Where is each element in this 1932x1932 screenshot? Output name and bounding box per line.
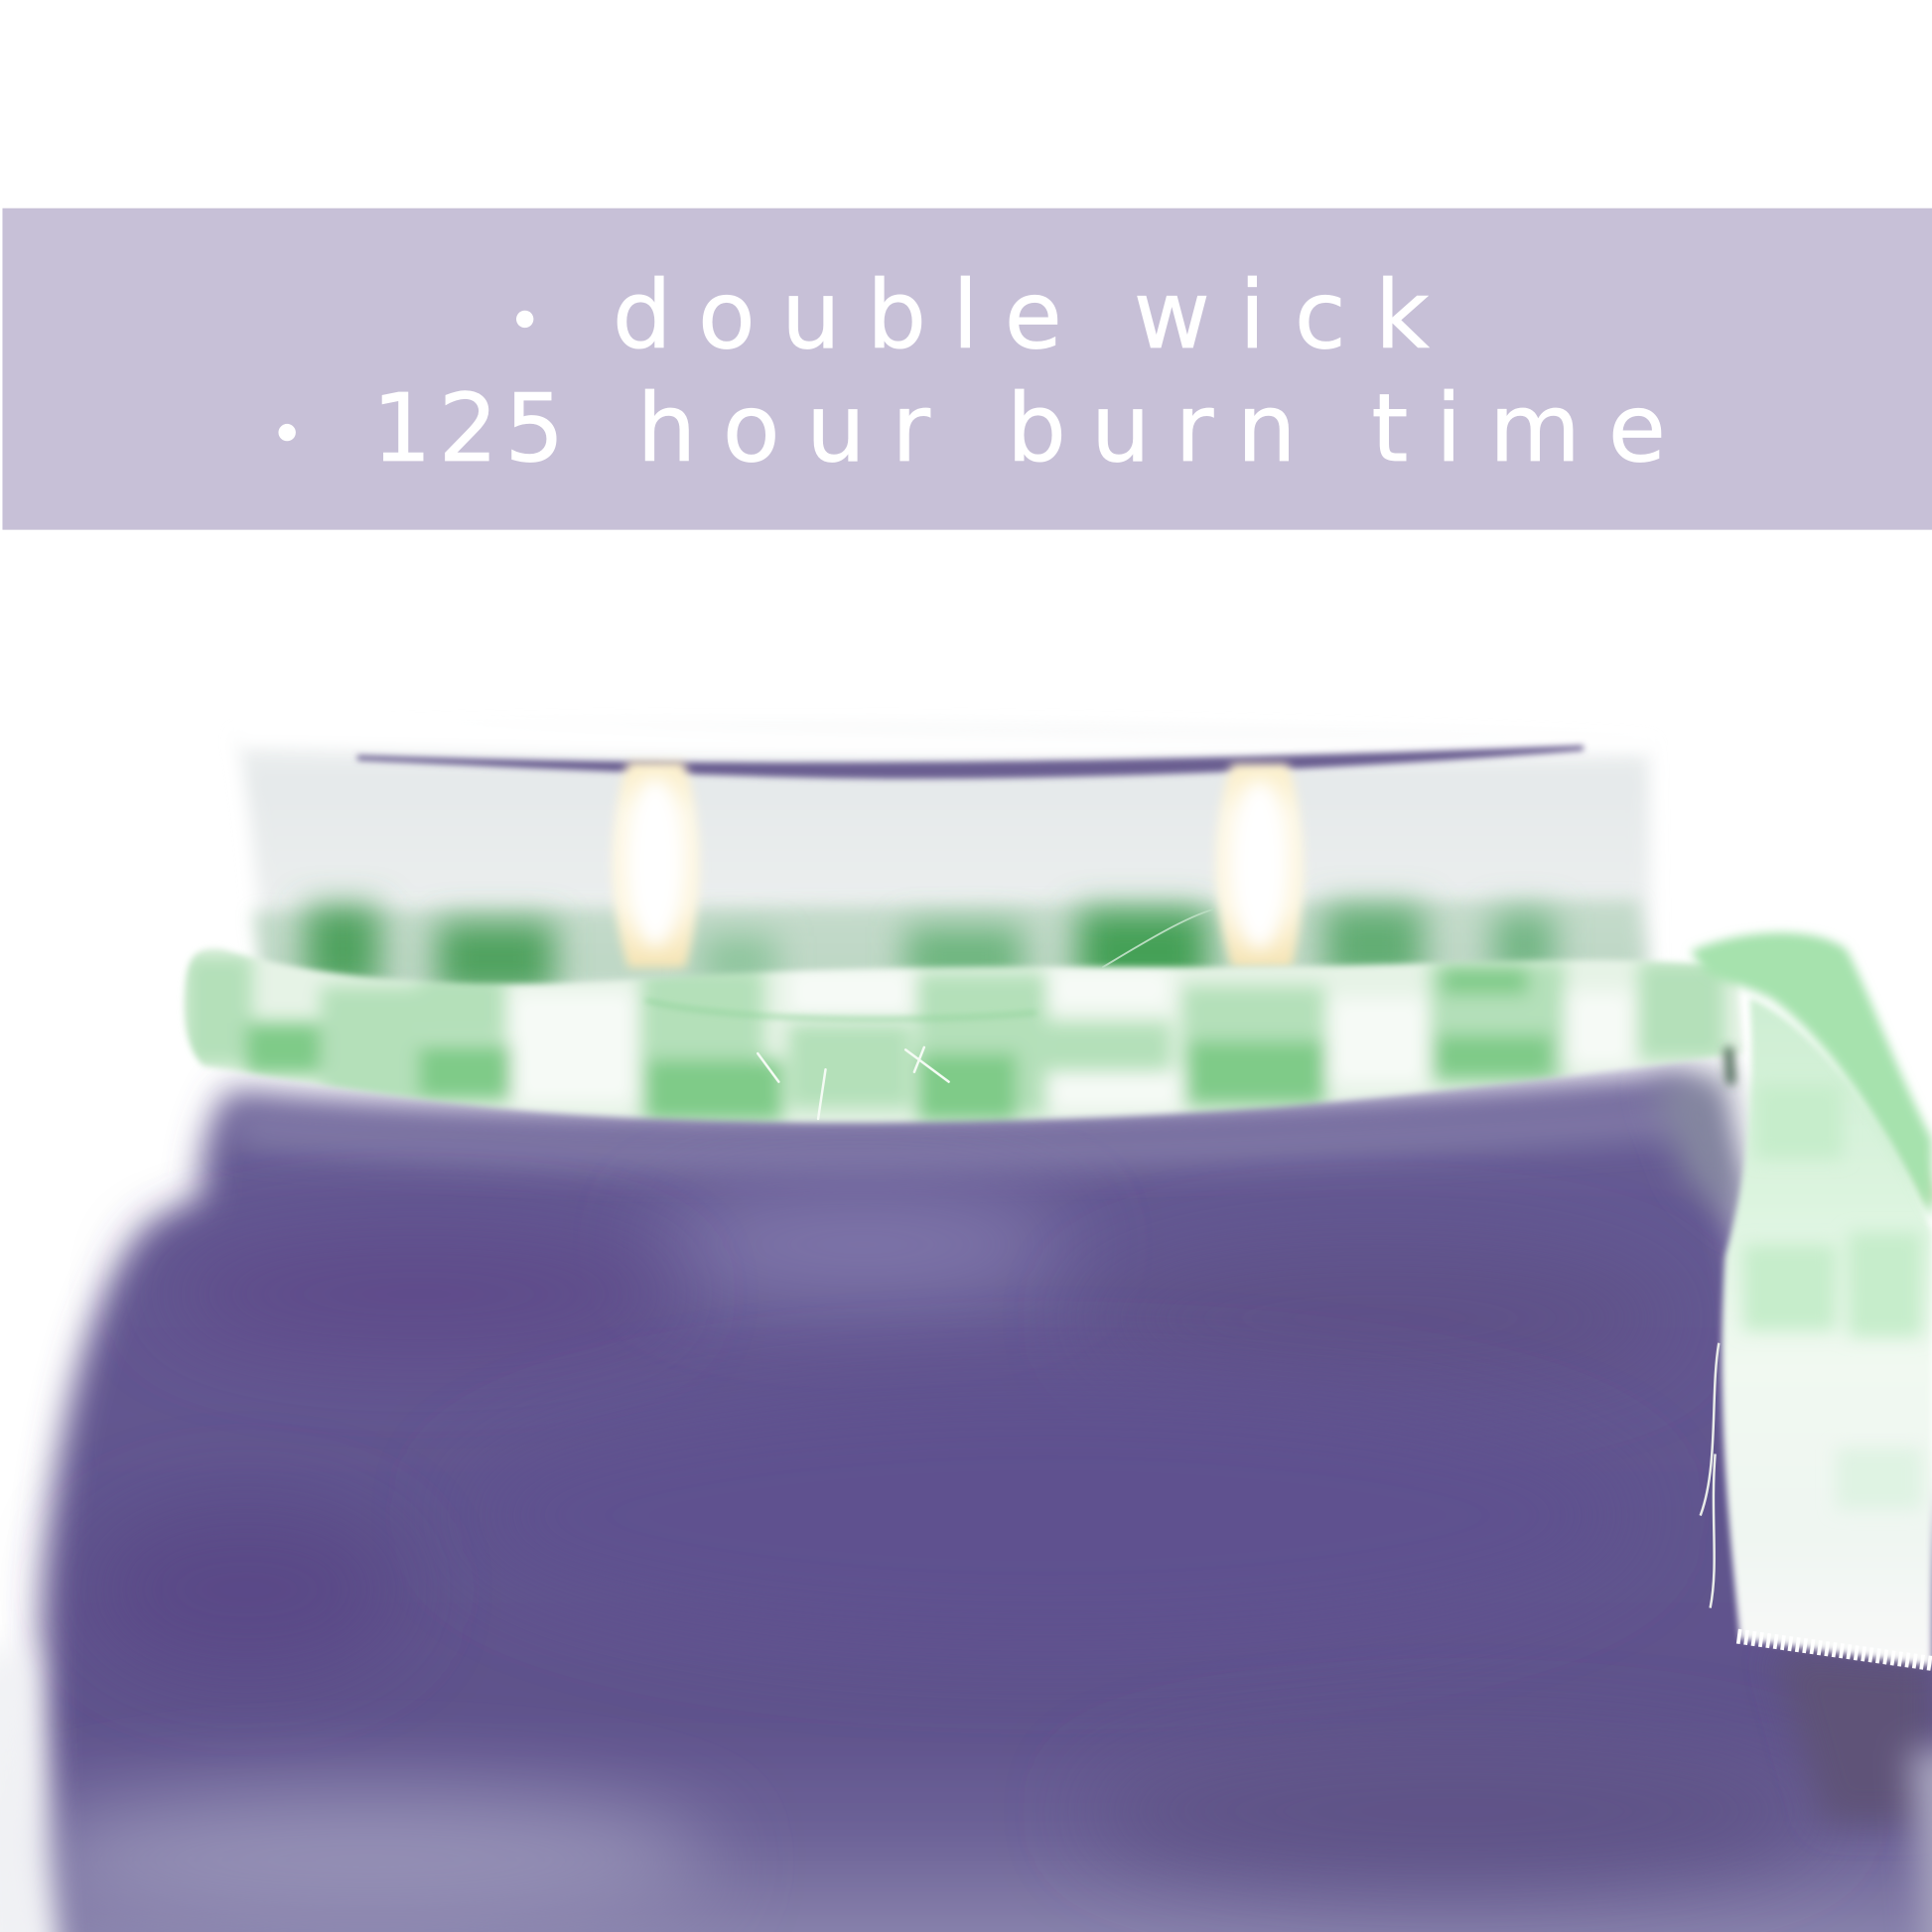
jar wax body [0, 1072, 1932, 1932]
frayed threads [1737, 1636, 1932, 1663]
banner [2, 208, 1932, 530]
ribbon tail [1701, 998, 1932, 1666]
banner text line 2: 125 hour burn time: time [1371, 374, 1666, 483]
left flame [612, 761, 700, 967]
ribbon fold lines and threads [647, 909, 1213, 1119]
rim line [357, 746, 1584, 778]
banner text line 2: 125 hour burn time: hour [637, 374, 930, 483]
right flame [1215, 763, 1304, 967]
banner text line 2: 125 hour burn time: 125 [372, 374, 564, 483]
banner text line 1: double wick: wick [1134, 261, 1430, 370]
banner text line 2: 125 hour burn time [278, 374, 1666, 483]
banner text line 1: double wick [516, 261, 1430, 370]
green wax band [306, 905, 1555, 996]
gingham ribbon [173, 909, 1762, 1134]
ribbon knot [1691, 932, 1932, 1220]
candle jar illustration [0, 702, 1932, 1932]
glass rim [234, 702, 1657, 996]
banner text line 2: 125 hour burn time: burn [1007, 374, 1297, 483]
banner text line 1: double wick: double [613, 261, 1062, 370]
